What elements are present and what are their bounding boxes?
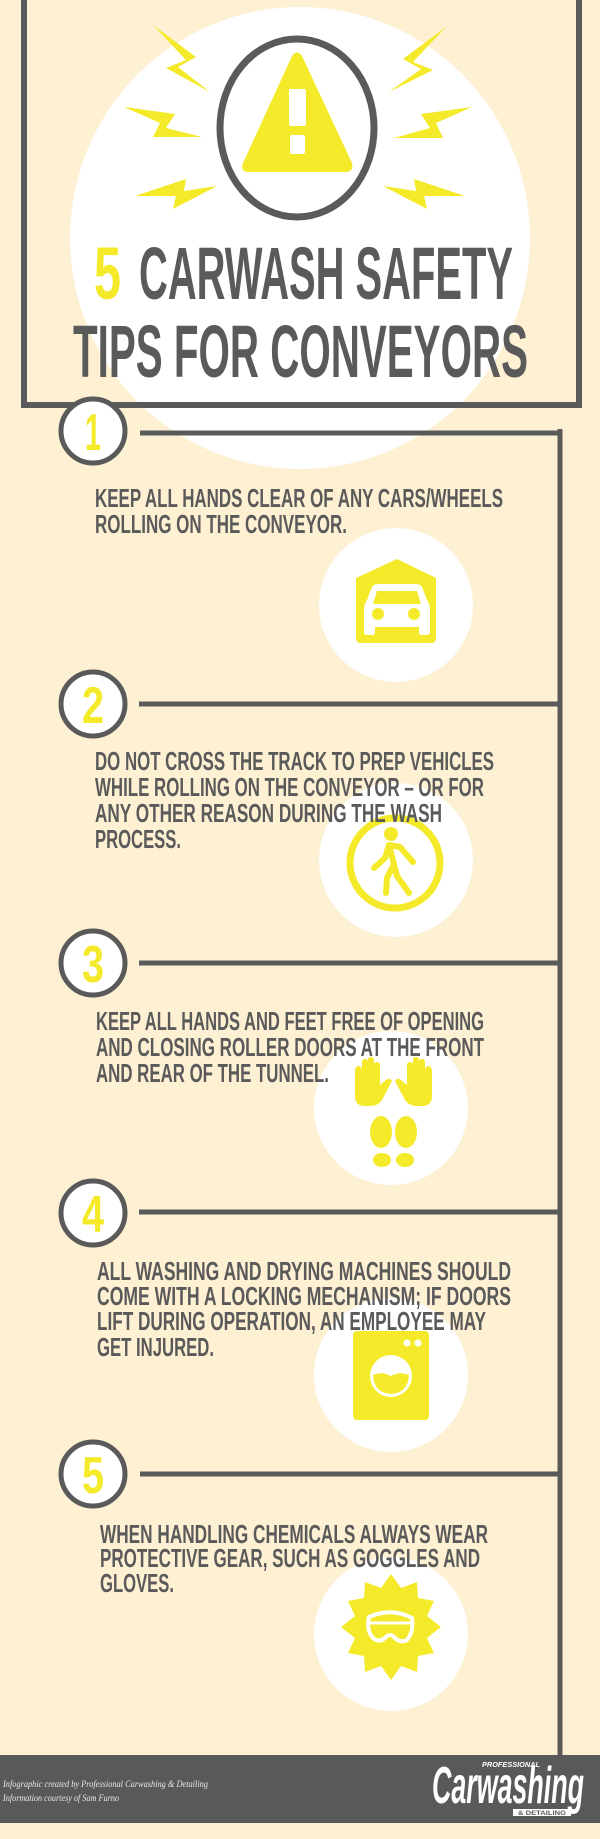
header frame bbox=[24, 0, 579, 405]
logo: PROFESSIONAL bbox=[482, 1762, 540, 1769]
text 5: GLOVES. bbox=[100, 1568, 174, 1598]
footer bar bbox=[0, 1755, 600, 1823]
number badge 5: 5 bbox=[82, 1447, 104, 1505]
text 1 bbox=[95, 483, 503, 539]
text 3 bbox=[96, 1006, 484, 1088]
title bbox=[73, 232, 528, 393]
tip 5 bbox=[61, 1442, 562, 1711]
number badge 3 bbox=[61, 931, 125, 995]
number badge 4 bbox=[61, 1181, 125, 1245]
number badge 1 bbox=[61, 399, 125, 463]
text 2: PROCESS. bbox=[95, 824, 181, 854]
text 3: AND REAR OF THE TUNNEL. bbox=[96, 1058, 329, 1088]
number badge 2 bbox=[61, 672, 125, 736]
number badge 3: 3 bbox=[82, 936, 104, 994]
timeline vertical line bbox=[558, 429, 562, 1756]
text 4: GET INJURED. bbox=[97, 1332, 214, 1362]
tip 1 bbox=[61, 399, 562, 682]
tip 3 bbox=[61, 931, 562, 1185]
number badge 2: 2 bbox=[82, 677, 104, 735]
tip 2 bbox=[61, 672, 562, 937]
icon: hands and feet bbox=[314, 1031, 468, 1185]
logo: & DETAILING bbox=[518, 1811, 566, 1817]
text 2 bbox=[95, 746, 494, 854]
number badge 4: 4 bbox=[82, 1186, 104, 1244]
tip 4 bbox=[61, 1181, 562, 1452]
footer credits: Information courtesy of Sam Furno bbox=[2, 1793, 119, 1803]
icon: car garage bbox=[319, 528, 473, 682]
footer credits bbox=[2, 1779, 208, 1803]
title: 5 bbox=[94, 232, 121, 315]
icon: washing machine bbox=[314, 1298, 468, 1452]
footer credits: Infographic created by Professional Carwashing & Detailing bbox=[2, 1779, 208, 1789]
icon: lightning bolts bbox=[124, 25, 472, 209]
icon: warning triangle bbox=[220, 39, 374, 217]
text 1: ROLLING ON THE CONVEYOR. bbox=[95, 509, 347, 539]
number badge 5 bbox=[61, 1442, 125, 1506]
icon: pedestrian bbox=[319, 783, 473, 937]
text 5 bbox=[100, 1519, 488, 1598]
icon: goggles starburst bbox=[314, 1557, 468, 1711]
text 4 bbox=[97, 1256, 511, 1362]
number badge 1: 1 bbox=[85, 404, 101, 462]
header: white circle background bbox=[70, 7, 530, 469]
